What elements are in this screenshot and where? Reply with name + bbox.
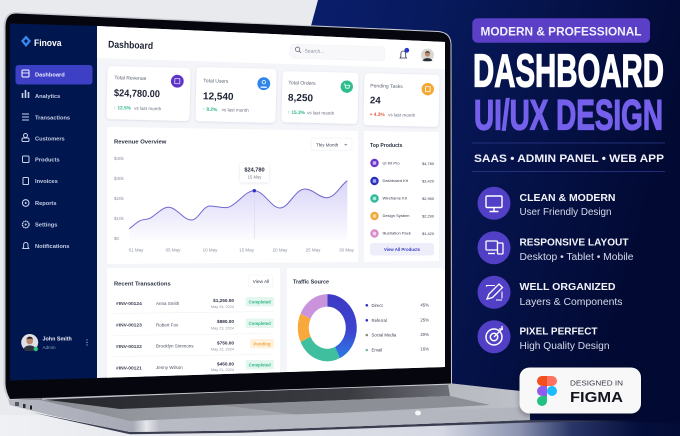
stat card: total orders: 8,250 <box>288 93 314 104</box>
x axis labels: 30 May <box>339 248 355 252</box>
background: floor gradient <box>0 415 680 436</box>
period dropdown: This Month <box>316 142 339 147</box>
transaction row 123: #INV-00123 <box>116 322 142 328</box>
area and line series <box>129 181 347 240</box>
donut chart <box>303 300 351 355</box>
feature: well organized <box>478 276 623 309</box>
transaction row 122: Pending <box>254 342 271 346</box>
product row: illustration pack <box>370 229 435 238</box>
view all products button: View All Products <box>384 247 421 252</box>
search box: Search... <box>304 48 325 55</box>
product row: illustration pack: Illustration Pack <box>382 230 411 236</box>
user profile: Admin <box>42 345 56 350</box>
transactions heading: Recent Transactions <box>114 282 171 288</box>
stat card: total revenue: $24,780.00 <box>114 88 160 100</box>
notification bell <box>400 48 409 58</box>
feature: well organized: Layers & Components <box>520 297 623 308</box>
background: navy diagonal panel <box>200 0 680 436</box>
transaction row 124: May 24, 2024 <box>211 305 234 309</box>
laptop base <box>8 383 640 434</box>
donut legend: 20% <box>420 332 429 337</box>
donut legend <box>366 302 429 352</box>
chart tooltip: 15 May <box>248 174 262 180</box>
stat card: total orders: vs last month <box>307 110 335 116</box>
transaction row 123 <box>116 318 274 330</box>
stat card: total orders <box>281 71 359 124</box>
transaction row 121: Completed <box>249 362 271 368</box>
y axis labels <box>114 156 125 241</box>
y axis labels: $20k <box>114 196 125 201</box>
transaction row 124: Anna Smith <box>156 301 180 306</box>
user profile: John Smith <box>42 336 72 342</box>
product row: ui kit pro: $4,780 <box>422 161 435 166</box>
donut legend: Email <box>372 348 382 352</box>
view all button: View All <box>253 279 269 285</box>
transaction row 124: $1,250.00 <box>213 298 234 303</box>
feature: well organized: WELL ORGANIZED <box>520 281 616 293</box>
transaction row 121: May 21, 2024 <box>211 368 234 372</box>
nav: customers: Customers <box>35 136 65 142</box>
badge: modern and professional <box>472 18 650 43</box>
product row: wireframe kit: Wireframe Kit <box>382 196 408 200</box>
transaction row 122 <box>116 339 274 352</box>
donut legend: 45% <box>420 302 429 308</box>
tagline: SAAS • ADMIN PANEL • WEB APP <box>474 153 664 165</box>
transaction row 122: $750.00 <box>217 340 234 345</box>
nav: settings: Settings <box>35 222 57 228</box>
top header bar <box>97 26 445 69</box>
stat card: pending tasks: + 4.3% <box>370 112 386 118</box>
chart tooltip: $24,780 <box>244 168 265 174</box>
nav: transactions: Transactions <box>35 116 70 122</box>
stat card: total orders: Total Orders <box>288 80 316 87</box>
transaction row 124: #INV-00124 <box>116 301 142 307</box>
nav: analytics <box>22 90 60 100</box>
stat card: total users: Total Users <box>203 78 229 85</box>
feature: pixel perfect: PIXEL PERFECT <box>520 325 598 337</box>
feature: responsive layout: RESPONSIVE LAYOUT <box>520 237 629 249</box>
traffic heading: Traffic Source <box>293 280 329 286</box>
x axis labels: 01 May <box>129 248 144 252</box>
laptop lid bezel <box>4 12 452 400</box>
donut legend: Direct <box>372 303 384 308</box>
y axis labels: $10k <box>114 216 125 221</box>
transaction row 121: #INV-00121 <box>116 366 142 372</box>
nav: products <box>22 156 60 164</box>
stat card: total orders: ↑ 15.3% <box>288 110 306 116</box>
y axis labels: $40k <box>114 156 125 161</box>
icon: pen tool <box>478 276 510 309</box>
product row: illustration pack: $1,420 <box>422 231 435 236</box>
badge: designed in figma: DESIGNED IN <box>570 378 623 388</box>
panel: traffic source <box>287 268 445 372</box>
x axis labels: 20 May <box>273 248 288 252</box>
transaction row 121: Jenny Wilson <box>156 365 183 370</box>
logo: Finova <box>34 38 62 48</box>
sidebar <box>10 24 97 380</box>
x axis labels: 25 May <box>306 248 321 252</box>
nav: notifications: Notifications <box>35 244 69 250</box>
view all button <box>248 275 272 287</box>
feature: clean and modern: User Friendly Design <box>520 207 612 218</box>
donut legend: Social Media <box>372 332 397 338</box>
nav: invoices: Invoices <box>35 179 58 185</box>
product row: dashboard kit <box>370 177 435 185</box>
icon: target <box>478 320 510 353</box>
logo <box>21 36 62 48</box>
product row: dashboard kit: $3,420 <box>422 178 435 184</box>
stat card: total users: 12,540 <box>203 91 234 103</box>
donut legend: 25% <box>420 318 429 322</box>
product row: wireframe kit: $2,950 <box>422 196 435 201</box>
stat card: pending tasks: Pending Tasks <box>370 83 403 90</box>
badge: designed in figma <box>520 368 641 414</box>
stat card: total revenue <box>106 66 191 121</box>
product row: dashboard kit: Dashboard Kit <box>382 178 409 183</box>
donut legend: 16% <box>420 346 429 352</box>
panel: top products <box>364 131 439 262</box>
nav: invoices <box>23 178 58 185</box>
x axis labels: 10 May <box>203 248 218 252</box>
panel: recent transactions <box>107 268 280 378</box>
stat card: total users: ↑ 8.2% <box>203 107 218 113</box>
icon: devices <box>478 231 510 264</box>
product row: ui kit pro: UI Kit Pro <box>382 160 400 166</box>
nav: settings <box>22 221 57 228</box>
x axis labels: 05 May <box>166 248 181 252</box>
main content area <box>97 26 445 378</box>
feature: clean and modern <box>478 187 616 220</box>
stat card: total users <box>195 67 277 123</box>
x axis labels: 15 May <box>239 248 255 252</box>
feature: clean and modern: CLEAN & MODERN <box>520 192 616 204</box>
product row: design system: $2,290 <box>422 214 435 218</box>
donut legend: Referral <box>372 318 387 323</box>
product row: design system: Design System <box>382 213 410 218</box>
badge: modern and professional: MODERN & PROFESSIONAL <box>480 27 642 39</box>
transaction row 122: May 22, 2024 <box>211 348 234 352</box>
transaction row 121 <box>116 360 274 372</box>
feature: pixel perfect <box>478 320 610 353</box>
transaction row 123: May 23, 2024 <box>211 326 234 330</box>
x axis labels <box>129 248 355 252</box>
feature: responsive layout <box>478 231 634 264</box>
nav: dashboard active: Dashboard <box>35 72 65 78</box>
stat card: total users: vs last month <box>222 107 249 113</box>
stat card: total revenue: vs last month <box>134 106 162 111</box>
transaction row 122: Brooklyn Simmons <box>156 344 194 348</box>
nav: reports: Reports <box>35 201 56 207</box>
stat card: pending tasks <box>363 73 440 127</box>
feature: pixel perfect: High Quality Design <box>520 341 610 352</box>
user profile <box>21 334 87 351</box>
chart tooltip <box>240 163 269 182</box>
badge: designed in figma: FIGMA <box>570 389 623 406</box>
chart heading: Revenue Overview <box>114 140 167 146</box>
product row: design system <box>370 212 435 220</box>
stat card: total revenue: ↑ 12.5% <box>114 105 132 112</box>
panel: revenue overview chart <box>107 127 358 264</box>
stat card: pending tasks: vs last month <box>388 112 416 118</box>
icon: monitor <box>478 187 510 220</box>
laptop screen <box>10 24 445 380</box>
page title: Dashboard <box>108 40 153 52</box>
transaction row 122: #INV-00122 <box>116 344 142 350</box>
nav: customers <box>22 134 65 142</box>
y axis labels: $0 <box>114 236 120 241</box>
transaction row 123: Robert Fox <box>156 322 179 327</box>
nav: notifications <box>23 243 69 250</box>
search box <box>290 44 385 61</box>
transaction row 123: Completed <box>249 321 271 326</box>
products heading: Top Products <box>370 143 403 149</box>
period dropdown <box>311 138 352 150</box>
nav: reports <box>22 200 56 207</box>
transaction row 121: $450.00 <box>217 362 234 366</box>
product row: wireframe kit <box>370 194 435 203</box>
stat card: total revenue: Total Revenue <box>114 75 147 82</box>
nav: transactions <box>22 114 70 122</box>
nav: products: Products <box>35 158 60 164</box>
nav: analytics: Analytics <box>35 94 60 100</box>
stat card: pending tasks: 24 <box>370 95 381 107</box>
transaction row 123: $880.00 <box>217 319 234 324</box>
nav: dashboard active <box>16 65 92 84</box>
feature: responsive layout: Desktop • Tablet • Mobile <box>520 252 634 263</box>
header avatar <box>421 49 434 61</box>
icon: figma logo <box>537 376 557 406</box>
product row: ui kit pro <box>370 159 435 167</box>
y axis labels: $30k <box>114 176 125 181</box>
transaction row 124 <box>116 297 274 309</box>
transaction row 124: Completed <box>249 300 271 304</box>
